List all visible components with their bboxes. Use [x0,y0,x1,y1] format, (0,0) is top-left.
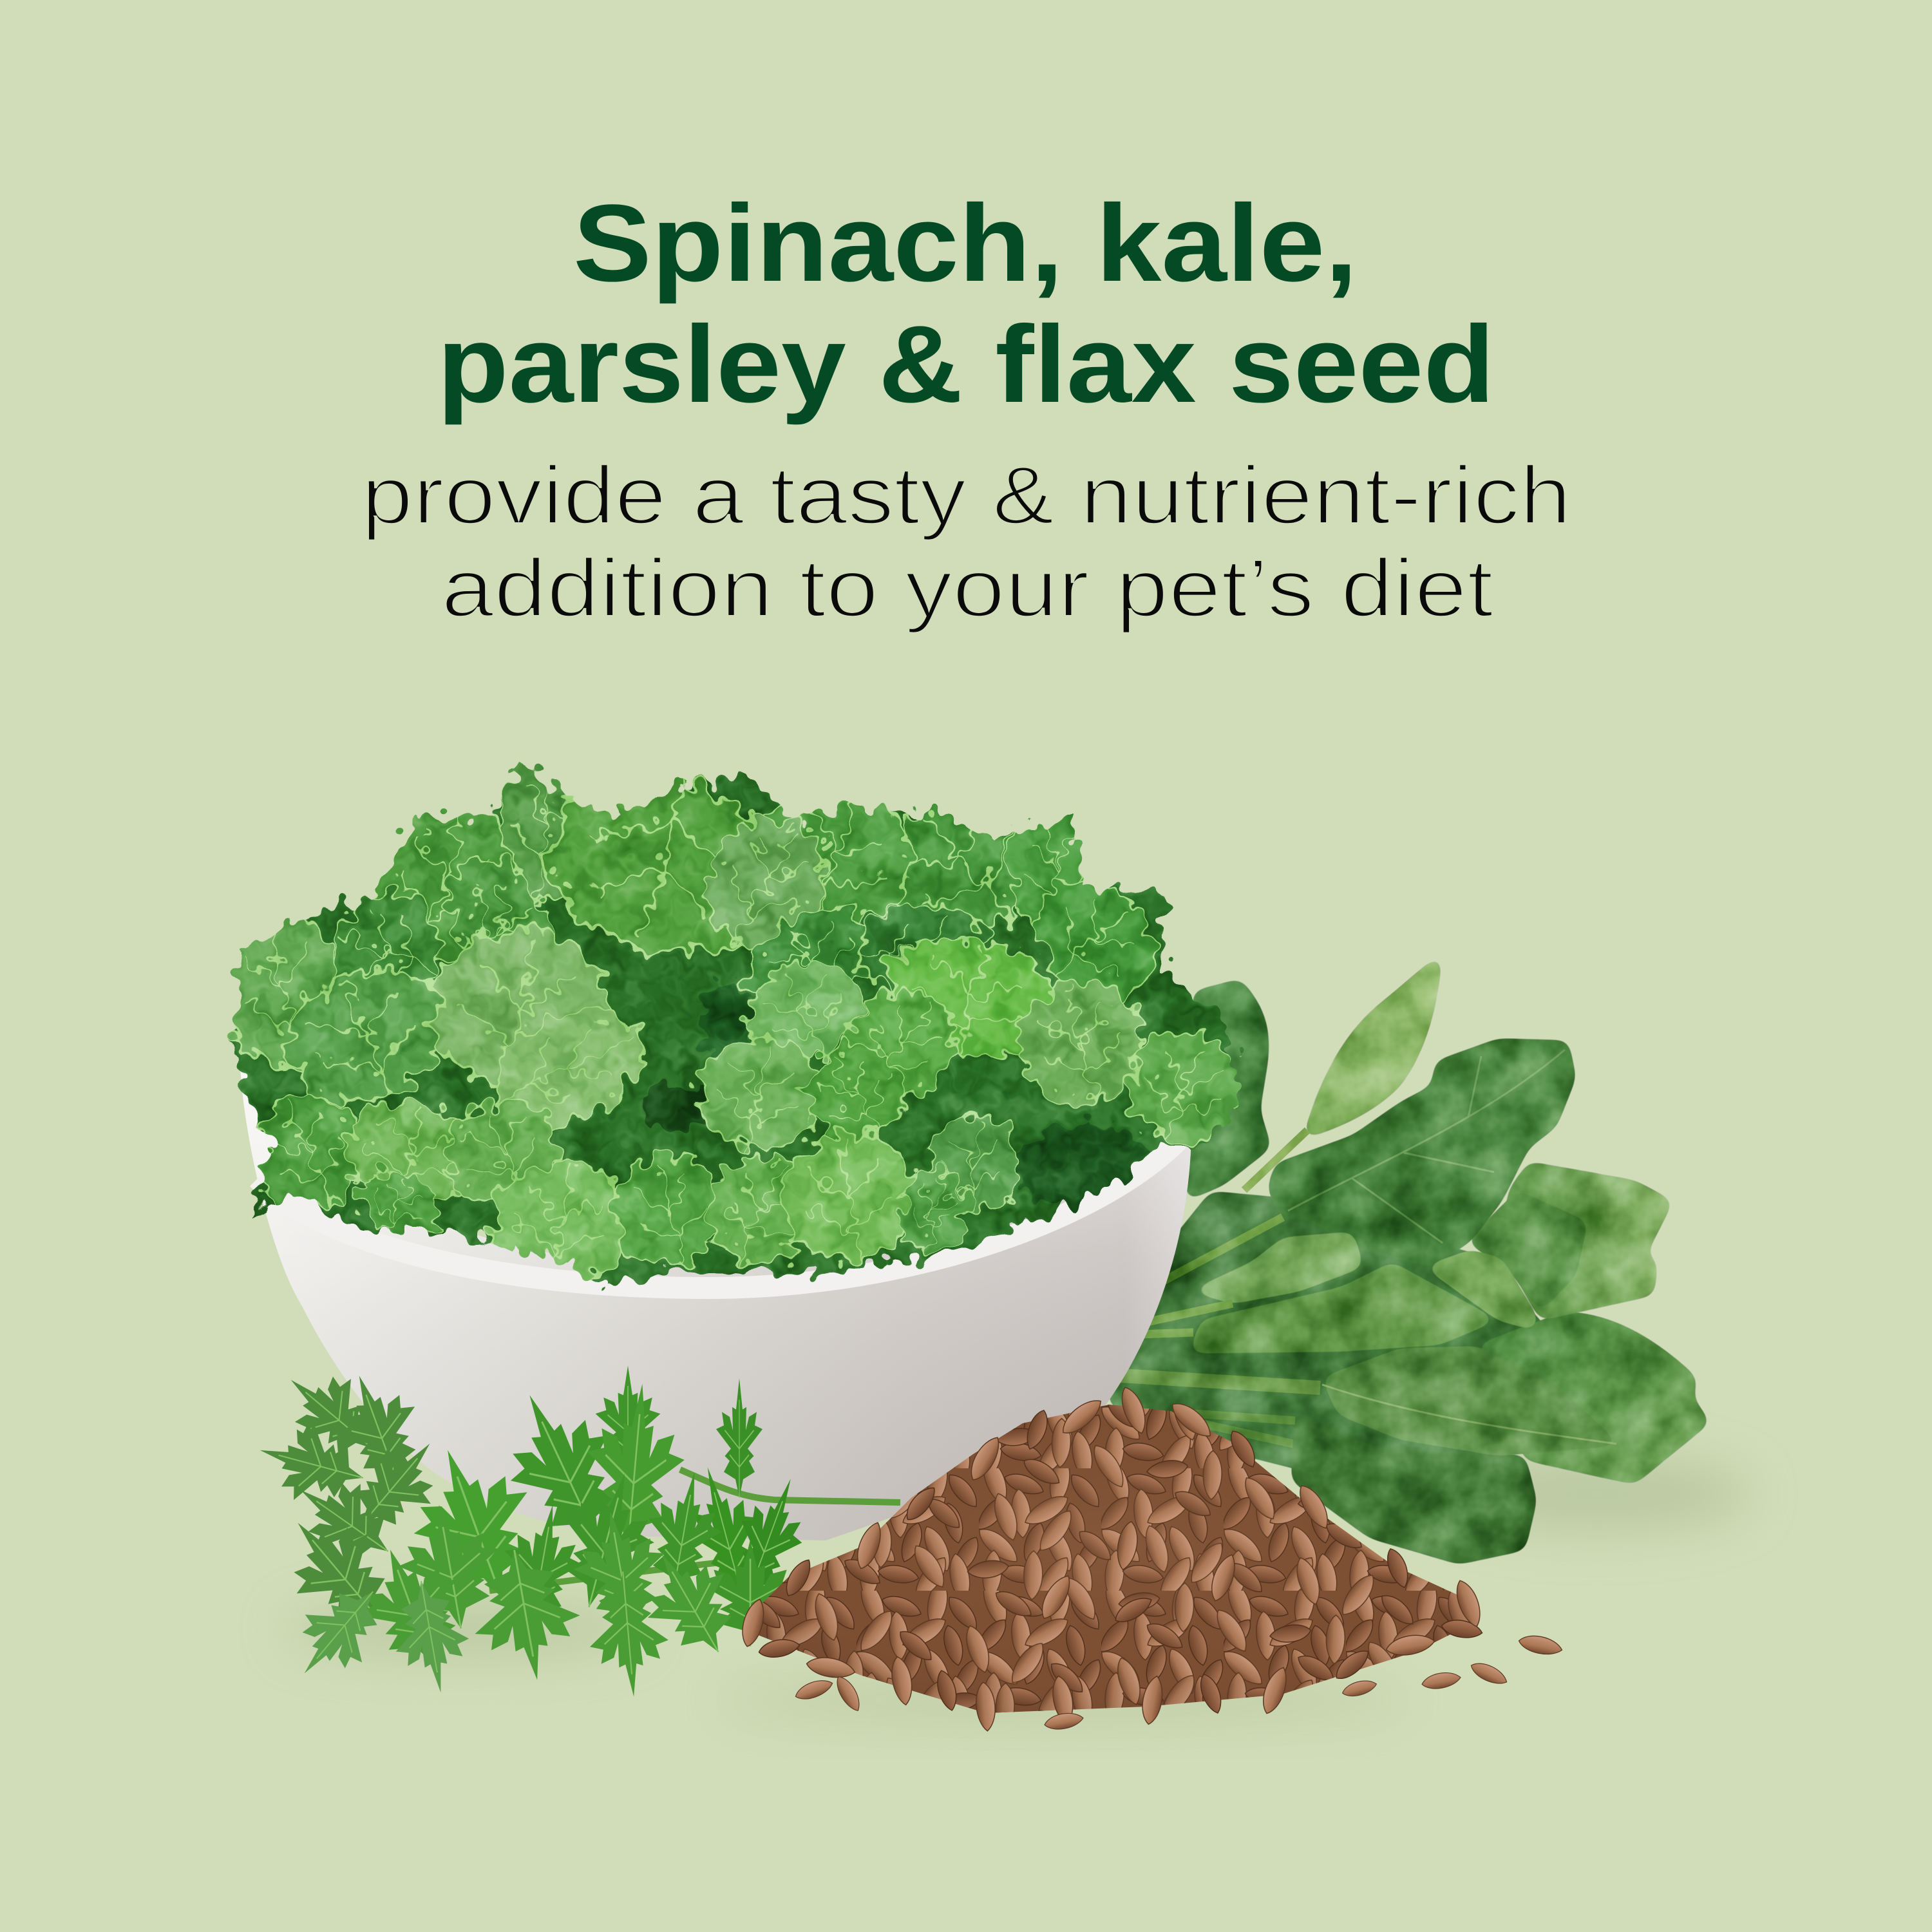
parsley front sprig [391,1365,821,1646]
spinach leaf: mid right [1466,1191,1587,1312]
illustration: white bowl [240,966,1191,1540]
parsley back sprig [250,1350,460,1649]
title: parsley & flax seed [437,303,1495,426]
spinach stems [1139,1217,1283,1334]
illustration: kale in the bowl [210,739,1259,1301]
title: Spinach, kale, [573,182,1358,305]
illustration: spinach bunch [1108,954,1710,1564]
parsley stems [489,1470,900,1591]
kale base [213,747,1256,1301]
flax pile body [745,1405,1479,1713]
subtitle text: provide a tasty & nutrient-rich [361,450,1571,542]
kale texture [213,747,1256,1301]
flax edge seeds [738,1384,1486,1732]
spinach base mass [1108,1191,1558,1475]
bowl body [240,1066,1191,1540]
spinach leaf: big dark [1267,1039,1576,1267]
subtitle text: addition to your pet’s diet [441,542,1493,634]
spinach leaf: middle small right [1424,1250,1537,1331]
spinach stem: upper [1244,1130,1307,1190]
spinach leaf: middle [1189,1262,1498,1353]
flax loose seeds [793,1633,1564,1732]
spinach leaf: small front [1189,1232,1363,1303]
spinach leaf vein [1288,1050,1565,1243]
bowl rim highlight [258,1140,1179,1288]
subtitle text [361,450,1571,634]
spinach leaf: upper light [1303,954,1441,1139]
spinach leaf behind bowl [1186,979,1271,1201]
ground shadows [283,1455,1752,1723]
spinach leaf: right light [1498,1162,1673,1320]
illustration: parsley [250,1350,900,1700]
spinach leaf: bottom dark [1291,1414,1537,1564]
bowl inner shadow [270,966,1172,1256]
spinach leaf: rear right [1478,1312,1710,1484]
title [437,182,1495,426]
spinach leaf: front [1322,1347,1621,1455]
kale leaves [210,739,1259,1296]
illustration: flax seed pile [738,1384,1564,1732]
